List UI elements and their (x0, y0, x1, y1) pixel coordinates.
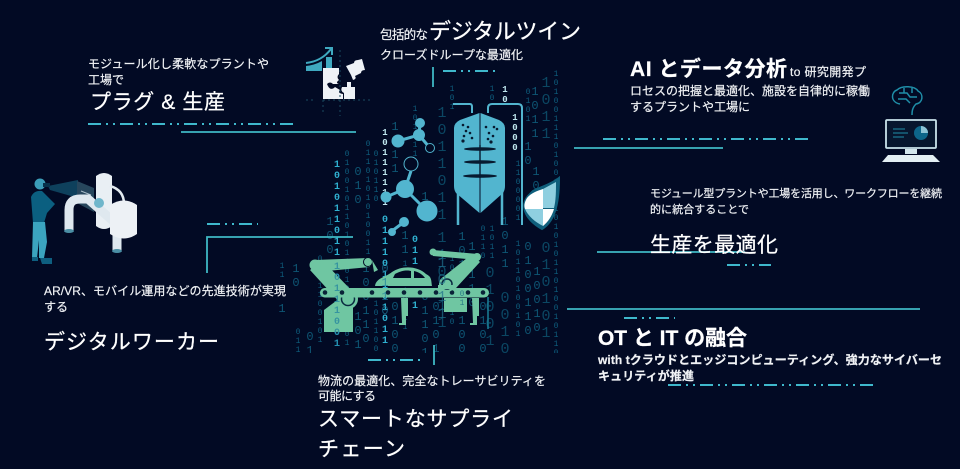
binary code rain background: 100 (323, 215, 337, 257)
text: digital worker (44, 283, 286, 354)
binary rain over robot (332, 255, 466, 350)
text: optimize production (650, 186, 942, 257)
text: AI and data analysis: AI とデータ分析 (630, 57, 787, 81)
binary code rain background: 101100 (372, 300, 380, 354)
binary rain over robot: 10111001 (332, 262, 342, 350)
binary code rain background: 0100 (476, 300, 490, 356)
binary code rain background: 01101 (418, 290, 432, 360)
connector lines (181, 67, 920, 365)
text: smart supply chain: 可能にする (318, 389, 376, 403)
binary code rain background: 10 (488, 85, 496, 103)
text: AI and data analysis (630, 57, 870, 114)
binary code rain background: 10010 (530, 265, 544, 335)
binary code rain background: 10 (521, 140, 535, 168)
text: digital twin: 包括的な (380, 27, 428, 42)
binary code rain background: 101001110100101101010110100101101010 (552, 70, 560, 394)
icon: AR worker and pipes (31, 173, 137, 264)
text: OT and IT convergence: OT と IT の融合 (598, 327, 747, 350)
binary rain over robot: 01 (458, 290, 466, 308)
binary code rain background: 0010 (496, 290, 514, 358)
binary code rain background: 1011 (488, 225, 496, 261)
text: AI and data analysis: するプラントや工場に (630, 100, 750, 114)
icon: robotic assembly line (310, 248, 489, 332)
binary code rain background: 1011 (538, 75, 554, 143)
text: digital twin: クローズドループな最適化 (380, 47, 523, 62)
binary rain over robot: 1011 (434, 255, 450, 323)
binary code rain background: 100110 (359, 262, 373, 346)
icon: AI brain (892, 87, 922, 115)
binary code rain background: 1100001 (514, 160, 522, 223)
binary code rain background: 011 (303, 330, 317, 372)
binary code rain background: 11 (278, 262, 286, 280)
binary code rain background: 011101101011 (380, 215, 390, 347)
text: digital worker: AR/VR、モバイル運用などの先進技術が実現 (44, 283, 286, 298)
binary code rain background: 0100101101011010101101 (342, 150, 352, 348)
text: optimize production: 生産を最適化 (650, 234, 778, 257)
text: digital twin: デジタルツイン (429, 19, 581, 44)
text: digital worker: する (44, 300, 68, 314)
binary code rain background: 10 (500, 85, 510, 105)
text: smart supply chain (318, 374, 546, 461)
text: plug and produce (88, 56, 269, 114)
dashed accent lines (88, 71, 875, 385)
binary code rain background: 11 (418, 190, 432, 218)
text: plug and produce: モジュール化し柔軟なプラントや (88, 56, 269, 71)
binary code rain background: 010101 (538, 240, 554, 342)
binary code rain background: 10111001 (332, 262, 342, 350)
binary code rain background: 011 (294, 328, 302, 355)
binary code rain background: 10 (289, 262, 303, 290)
text: plug and produce: プラグ & 生産 (90, 91, 225, 114)
binary code rain background: 010 (351, 165, 365, 207)
icon: shield (524, 178, 559, 229)
binary code rain background: 1010110 (410, 105, 420, 168)
binary code rain background: 01101010100110 (364, 140, 372, 266)
binary code rain background: 101 (351, 310, 365, 352)
text: optimize production: 的に統合することで (650, 202, 749, 216)
binary code rain background: 100 (529, 165, 543, 207)
binary code rain background: 1011 (498, 215, 512, 271)
binary rain over robot: 0110 (378, 262, 392, 318)
binary code rain background (279, 70, 558, 353)
text: OT and IT convergence (597, 327, 942, 383)
binary code rain background: 010110 (372, 150, 380, 204)
binary code rain background: 101011011 (332, 160, 342, 259)
text: plug and produce: 工場で (88, 73, 124, 87)
binary code rain background: 10110110 (448, 255, 456, 327)
text: OT and IT convergence: with tクラウドとエッジコンピューティング、強力なサイバーセ (597, 352, 942, 367)
binary code rain background: 1011 (388, 120, 402, 176)
binary code rain background: 0110101 (410, 235, 420, 312)
binary code rain background: 0100110 (521, 240, 535, 338)
text: smart supply chain: チェーン (318, 438, 405, 461)
icon: molecule (381, 118, 437, 236)
binary code rain background: 1 (275, 302, 289, 316)
text: smart supply chain: 物流の最適化、完全なトレーサビリティを (318, 374, 546, 388)
text: digital worker: デジタルワーカー (44, 331, 219, 354)
icon: fermentation tank (453, 104, 522, 225)
binary code rain background: 0101100101 (316, 255, 324, 345)
text: OT and IT convergence: キュリティが推進 (598, 368, 694, 383)
binary code rain background: 10110 (465, 240, 479, 310)
text: optimize production: モジュール型プラントや工場を活用し、ワークフローを継続 (650, 186, 942, 200)
binary code rain background: 0110 (478, 225, 488, 261)
text: smart supply chain: スマートなサプライ (318, 408, 513, 431)
binary code rain background: 101 (448, 85, 456, 112)
binary code rain background: 0101 (429, 300, 443, 356)
binary code rain background: 110111 (434, 230, 450, 332)
binary code rain background: 1000 (510, 113, 520, 153)
binary code rain background: 01001 (482, 265, 498, 350)
text: digital twin (380, 19, 581, 62)
text: AI and data analysis: ロセスの把握と最適化、施設を自律的に稼働 (630, 83, 870, 98)
icon: computer dashboard (882, 120, 940, 162)
binary code rain background: 01001 (455, 300, 469, 370)
binary code rain background: 10110011 (400, 260, 410, 332)
binary code rain background: 1011011 (434, 105, 450, 224)
binary code rain background: 10111111 (380, 128, 390, 208)
binary code rain background: 01001 (388, 300, 402, 370)
binary code rain background: 10110100101 (514, 240, 522, 339)
text: AI and data analysis: to 研究開発プ (790, 65, 866, 79)
binary code rain background: 101 (455, 230, 469, 272)
binary code rain background: 0101 (524, 88, 532, 124)
binary code rain background: 1011 (528, 85, 542, 141)
binary code rain background: 011 (398, 215, 412, 257)
icon: chart and puzzle pieces (306, 48, 372, 116)
